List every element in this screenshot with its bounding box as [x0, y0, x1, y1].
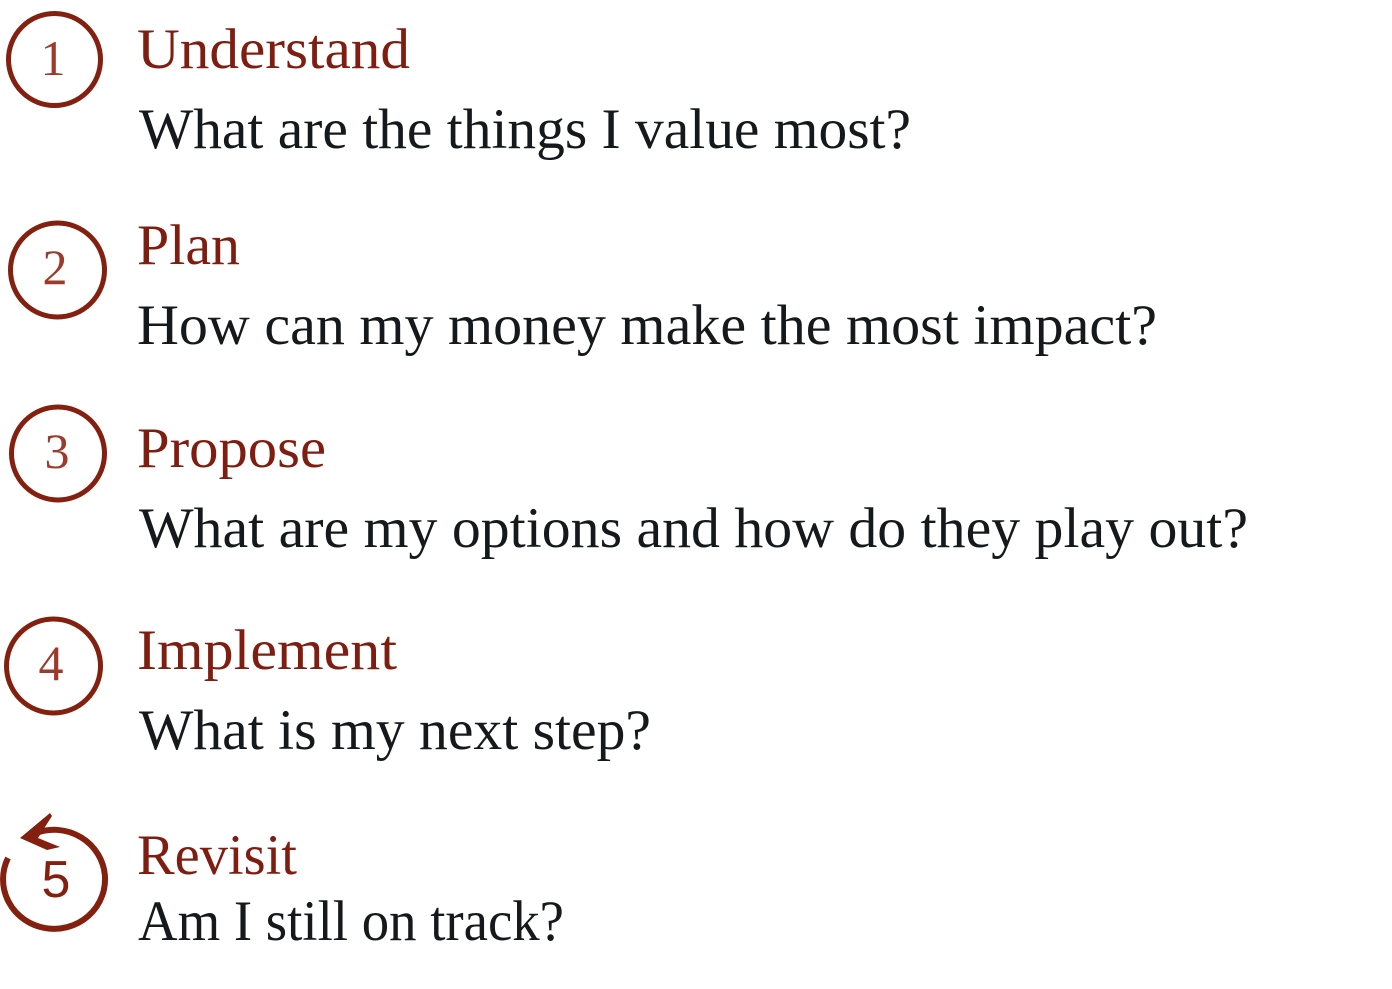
icon: circular arrow with number 5 — [3, 813, 105, 929]
heading: Implement: Implement — [137, 619, 397, 682]
icon: circled number 1: 1 — [40, 30, 66, 86]
step 1: understand — [8, 14, 911, 161]
question: step 2: How can my money make the most impact? — [137, 294, 1157, 357]
heading: Revisit: Revisit — [137, 824, 297, 887]
icon: circled number 3: 3 — [44, 423, 70, 479]
icon: circled number 2: 2 — [42, 239, 68, 295]
heading: Plan: Plan — [137, 214, 240, 277]
icon: circled number 3 — [12, 407, 104, 500]
heading: Propose: Propose — [137, 417, 326, 480]
icon: circled number 1 — [8, 14, 100, 106]
icon: circled number 2 — [10, 223, 104, 317]
question: step 1: What are the things I value most? — [139, 98, 911, 161]
step 5: revisit — [3, 813, 564, 953]
question: step 5: Am I still on track? — [138, 890, 564, 953]
step 2: plan — [10, 214, 1157, 357]
step 3: propose — [12, 407, 1248, 560]
question: step 3: What are my options and how do they play out? — [139, 497, 1248, 560]
heading: Understand: Understand — [137, 18, 410, 81]
step 4: implement — [6, 619, 651, 762]
question: step 4: What is my next step? — [139, 699, 651, 762]
icon: circled number 4 — [6, 619, 100, 713]
icon: circular arrow with number 5: 5 — [42, 851, 70, 909]
icon: circled number 4: 4 — [38, 635, 64, 691]
